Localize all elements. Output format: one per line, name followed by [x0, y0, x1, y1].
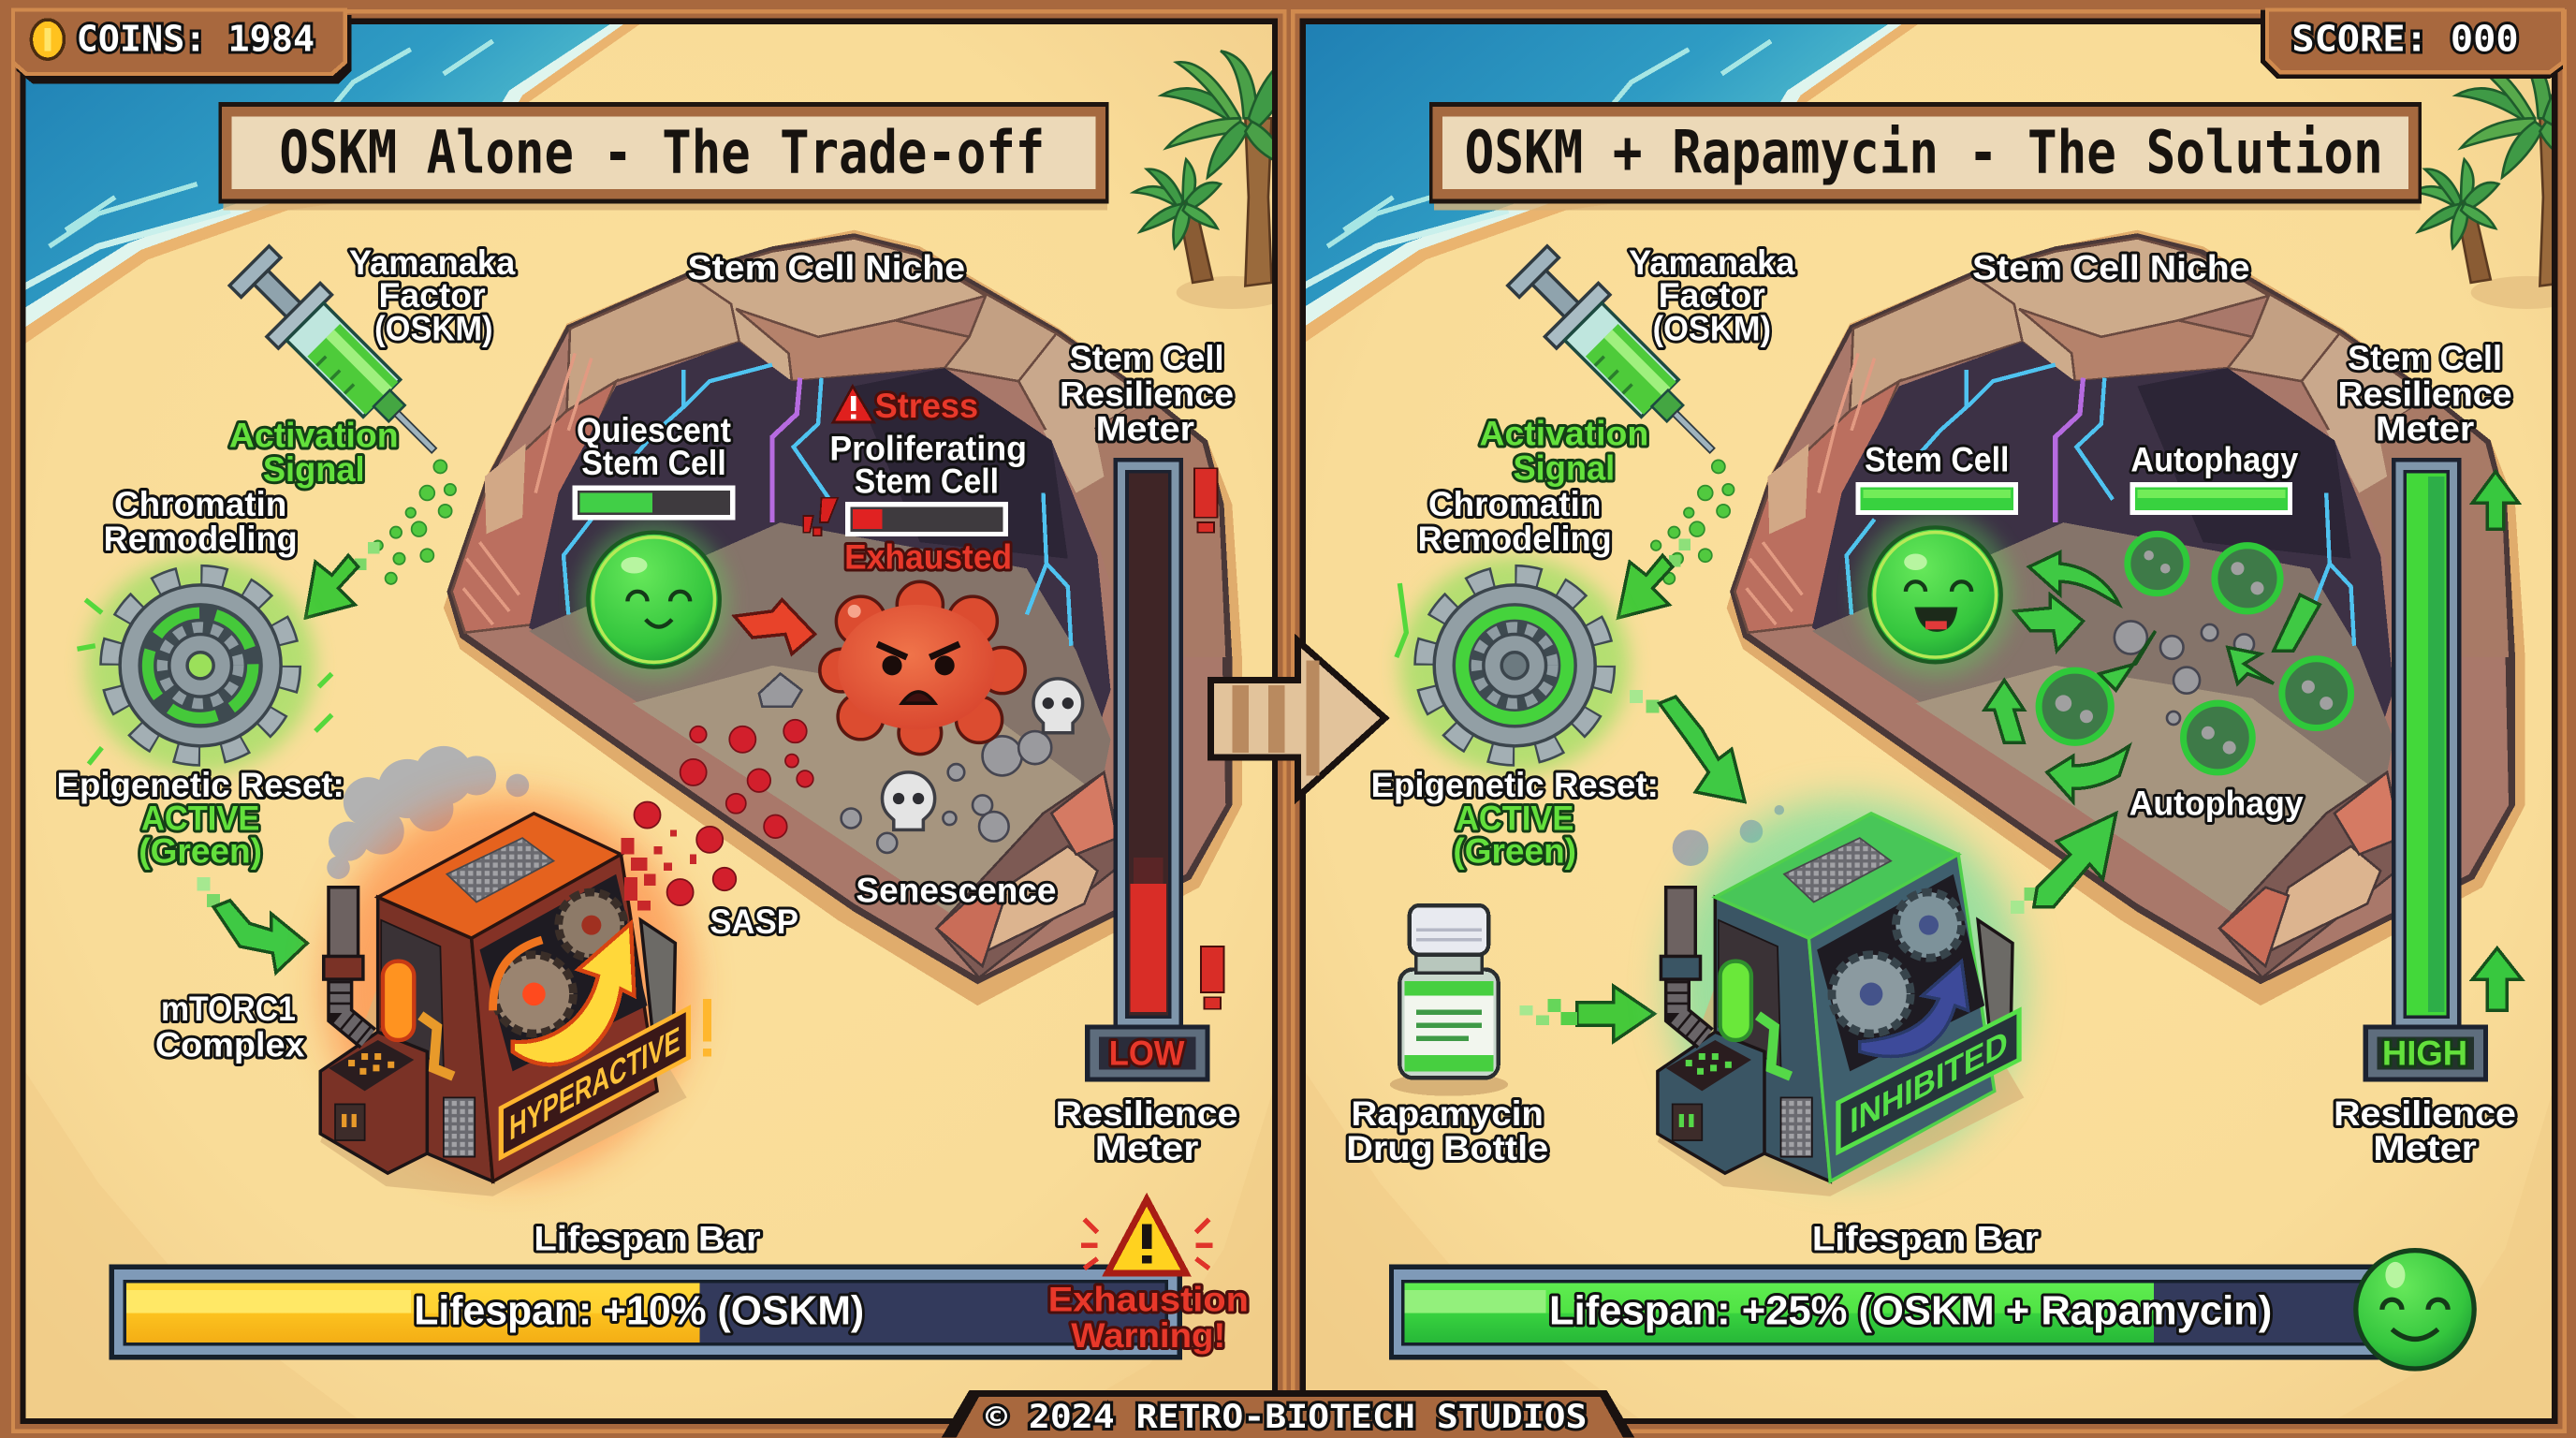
labels left: Lifespan Bar [534, 1220, 761, 1258]
autophagy health bar [2132, 485, 2291, 513]
labels right: Chromatin [1428, 485, 1601, 523]
coins text: COINS: 1984 [77, 18, 315, 60]
labels left: SASP [710, 902, 798, 941]
syringe right [1500, 239, 1739, 584]
quiescent health bar [575, 488, 733, 518]
green arrow from bottle [1519, 986, 1654, 1042]
panel: OSKM + Rapamycin [1301, 22, 2576, 1421]
labels left: Complex [155, 1026, 305, 1064]
stem cell health bar [1858, 485, 2016, 513]
recycling arrows [1984, 552, 2320, 801]
labels left: Stem Cell [855, 462, 999, 501]
labels left: Resilience [1060, 375, 1234, 414]
labels right: Stem Cell [1865, 441, 2009, 479]
labels right: Meter [2376, 409, 2474, 448]
labels left: LOW [1109, 1034, 1185, 1072]
exclamation [703, 999, 711, 1042]
mTORC1 machine inhibited [1658, 799, 2024, 1196]
SASP splash [621, 829, 696, 910]
labels right: Epigenetic Reset: [1371, 766, 1659, 804]
syringe left [223, 239, 461, 584]
green arrow to autophagy [2011, 814, 2116, 914]
sand background left [23, 22, 1275, 1421]
autophagy debris [2115, 621, 2254, 725]
palm tree small left [1134, 159, 1221, 283]
faded arrow [1860, 961, 1969, 1056]
labels right: Resilience [2334, 1094, 2516, 1133]
happy slime cell [1856, 513, 2014, 677]
labels right [1346, 243, 2516, 1334]
labels left: Exhausted [844, 537, 1012, 576]
mTORC1 machine hyperactive [320, 795, 711, 1196]
labels right: Signal [1513, 448, 1615, 487]
banner: HYPERACTIVE: HYPERACTIVE [509, 1019, 681, 1149]
labels right: Stem Cell [2348, 339, 2502, 377]
gears in window [494, 892, 624, 1034]
labels left: Epigenetic Reset: [57, 766, 344, 804]
labels right: (Green) [1453, 831, 1576, 870]
labels right: Drug Bottle [1346, 1129, 1548, 1167]
icon: chromatin gear left [77, 557, 332, 774]
labels right: Yamanaka [1629, 243, 1795, 282]
glowing tube [383, 961, 414, 1040]
green arrow to mTORC1 [198, 877, 307, 973]
labels left: Signal [263, 450, 365, 489]
yellow hyperactive arrow [513, 923, 634, 1064]
small smoke puffs [1673, 805, 1784, 866]
panel: OSKM alone [23, 22, 1298, 1421]
orange circular arrow [493, 940, 542, 1010]
labels right: Autophagy [2130, 441, 2299, 479]
quiescent slime cell [578, 521, 729, 679]
labels right: Activation [1479, 415, 1648, 453]
footer text: © 2024 RETRO-BIOTECH STUDIOS [986, 1398, 1587, 1436]
green tube [1720, 961, 1751, 1040]
icon: coin [31, 20, 64, 59]
labels left [57, 243, 1249, 1355]
red arrow [735, 600, 815, 654]
labels left: Stem Cell [1070, 339, 1224, 377]
labels left: Chromatin [114, 485, 286, 523]
exhausted red cell [820, 581, 1025, 755]
rapamycin bottle [1390, 905, 1508, 1096]
stress warning icon [833, 386, 874, 422]
smoke cloud [327, 746, 529, 879]
warning triangle [1081, 1199, 1212, 1273]
labels right: (OSKM) [1653, 309, 1771, 347]
SASP particles [634, 720, 813, 905]
labels left: (Green) [139, 831, 262, 870]
labels right: Lifespan: +25% (OSKM + Rapamycin) [1549, 1288, 2272, 1334]
green arrow to gear [305, 542, 379, 618]
score text: SCORE: 000 [2291, 18, 2519, 60]
icon: chromatin gear right [1397, 557, 1630, 774]
labels left: Stem Cell [581, 444, 726, 482]
labels left: ACTIVE [141, 799, 259, 837]
labels left: Exhaustion [1048, 1281, 1249, 1319]
labels right: Meter [2373, 1129, 2477, 1167]
green curved arrow down to machine [1630, 690, 1745, 801]
dune shading right [1303, 1068, 2554, 1421]
labels left: Activation [229, 416, 399, 454]
labels left: Stem Cell Niche [688, 248, 965, 286]
resilience meter high [2365, 460, 2485, 1079]
proliferating health bar [848, 505, 1005, 534]
ocean left [23, 22, 644, 345]
labels left: Warning! [1071, 1316, 1225, 1355]
banner: INHIBITED: INHIBITED [1850, 1023, 2008, 1141]
green arrow to gear right [1618, 539, 1690, 618]
labels left: Senescence [856, 872, 1057, 910]
central arrow [1211, 640, 1385, 797]
happy face icon [2356, 1251, 2474, 1369]
labels right: Remodeling [1418, 520, 1612, 558]
footer tab [942, 1390, 1634, 1438]
title plate left [218, 102, 1109, 211]
labels left: Resilience [1056, 1094, 1237, 1133]
labels left: Remodeling [104, 520, 298, 558]
palm tree large left [1157, 50, 1272, 309]
labels left: Factor [379, 276, 486, 315]
stem cell niche cave left [444, 230, 1242, 1005]
resilience meter low [1088, 460, 1224, 1079]
labels right: Autophagy [2130, 785, 2304, 823]
labels right: Rapamycin [1352, 1094, 1544, 1133]
meter up arrows [2472, 472, 2522, 1010]
lifespan bar left [111, 1267, 1179, 1357]
senescent debris and skulls [759, 674, 1083, 853]
palm tree small right [2411, 159, 2499, 283]
labels left: Quiescent [577, 411, 731, 449]
title right: OSKM + Rapamycin - The Solution [1465, 117, 2383, 186]
labels left: Stress [875, 387, 978, 425]
red exclamation marks near bar [803, 498, 838, 536]
title left: OSKM Alone - The Trade-off [279, 117, 1045, 186]
labels left: Lifespan: +10% (OSKM) [414, 1288, 864, 1334]
score badge [2261, 10, 2563, 79]
ocean right [1301, 22, 1922, 345]
title plate right [1429, 102, 2422, 211]
labels left: Yamanaka [349, 243, 516, 282]
labels left: mTORC1 [161, 990, 296, 1028]
labels right: Lifespan Bar [1812, 1220, 2039, 1258]
labels left: Proliferating [829, 429, 1027, 467]
labels right: ACTIVE [1456, 799, 1573, 837]
labels left: (OSKM) [374, 309, 493, 347]
labels left: Meter [1096, 409, 1194, 448]
labels right: Stem Cell Niche [1972, 248, 2250, 286]
autophagosomes [2039, 534, 2351, 772]
gears in window [1832, 892, 1962, 1034]
lifespan bar right [1392, 1267, 2393, 1357]
labels left: Meter [1095, 1129, 1198, 1167]
palm tree large right [2456, 51, 2576, 309]
labels right: Factor [1659, 276, 1765, 315]
banner: HYPERACTIVE [501, 1008, 688, 1157]
coins badge [13, 10, 352, 84]
labels right: HIGH [2382, 1034, 2467, 1072]
labels right: Resilience [2338, 375, 2512, 414]
sand background right [1303, 22, 2554, 1421]
dune shading left [23, 1068, 1275, 1421]
stem cell niche cave right [1727, 230, 2525, 1005]
